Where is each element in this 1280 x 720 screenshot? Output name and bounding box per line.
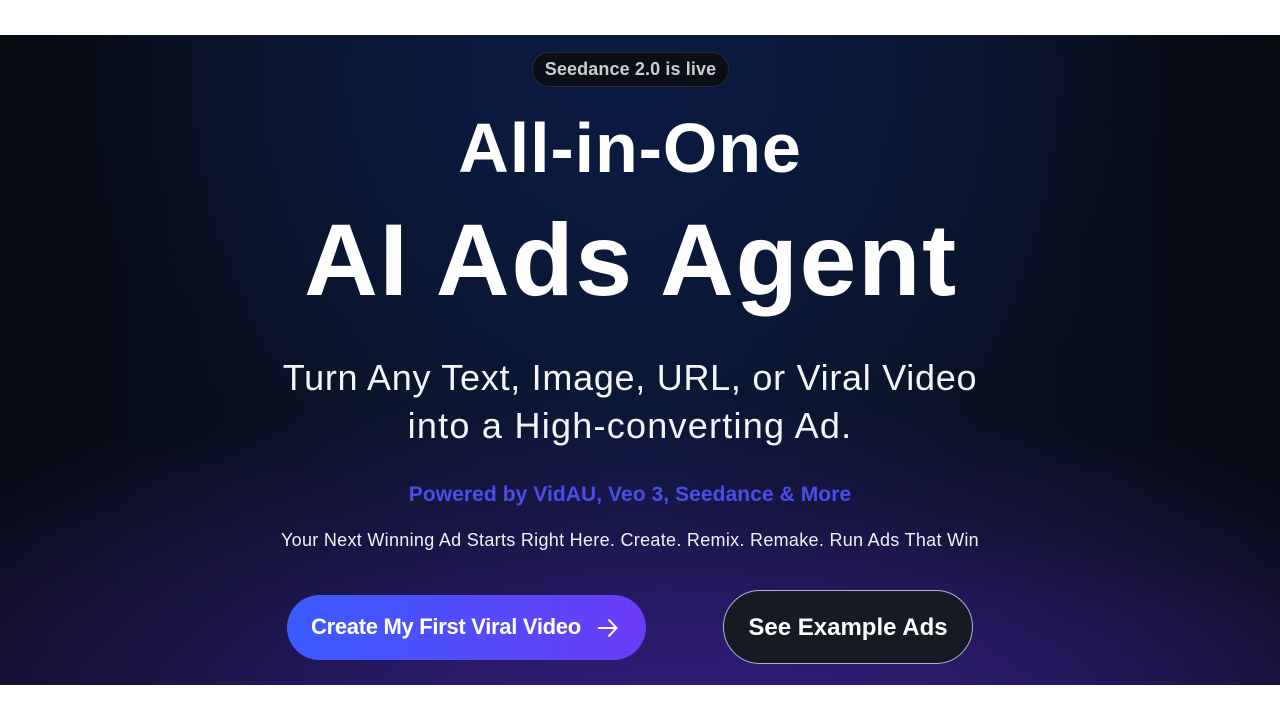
powered by line: Powered by VidAU, Veo 3, Seedance & More [409,483,851,506]
status badge [532,52,729,87]
title line two: AI Ads Agent [304,203,958,317]
title line one: All-in-One [458,109,802,187]
secondary button [723,590,973,664]
tagline: Your Next Winning Ad Starts Right Here. Create. Remix. Remake. Run Ads That Win [281,530,979,550]
primary button [287,595,646,660]
secondary button label: See Example Ads [748,614,948,641]
icon: arrow [598,618,618,638]
subtitle: Turn Any Text, Image, URL, or Viral Video [283,357,977,398]
subtitle [283,357,977,446]
status badge: Seedance 2.0 is live [545,59,716,79]
primary button label: Create My First Viral Video [311,614,581,639]
subtitle: into a High-converting Ad. [408,405,852,446]
